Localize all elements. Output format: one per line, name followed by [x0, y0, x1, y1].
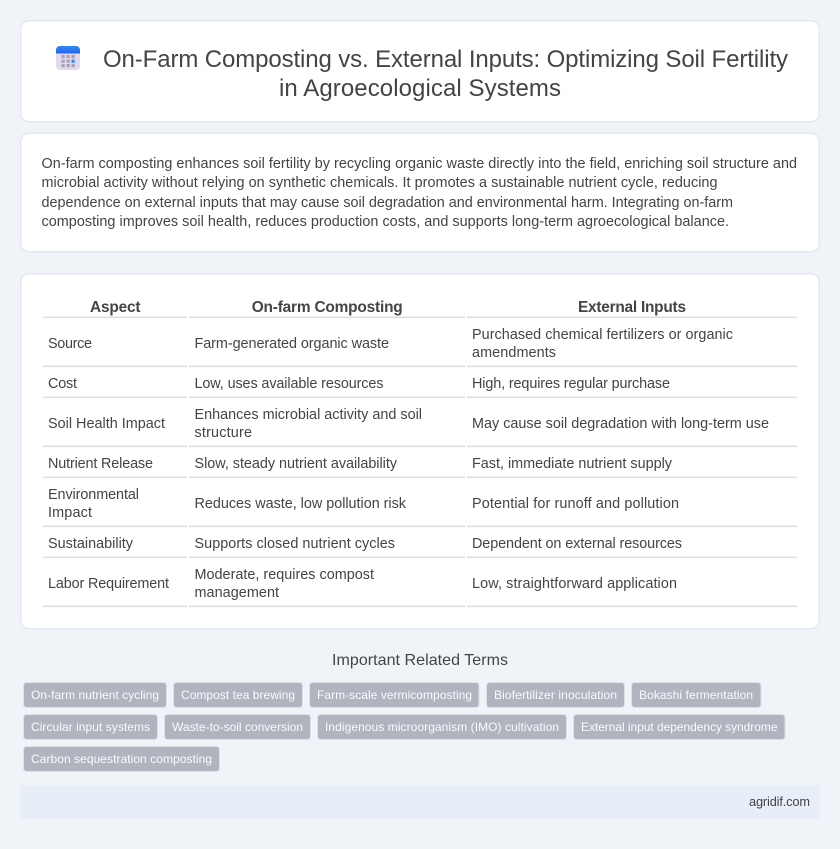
row: nutrient release: Fast, immediate nutrient supply: [472, 456, 673, 472]
tag list: Waste-to-soil conversion: [172, 720, 303, 734]
row: labor requirement: Labor Requirement: [48, 576, 169, 592]
tag list: On-farm nutrient cycling: [31, 688, 159, 702]
row: environmental impact: Reduces waste, low pollution risk: [194, 496, 407, 512]
row: environmental impact: Potential for runoff and pollution: [472, 496, 679, 512]
tag list: [24, 682, 785, 772]
row: cost: [48, 376, 670, 392]
row: nutrient release: [48, 456, 673, 472]
row: labor requirement: Low, straightforward application: [472, 576, 677, 592]
row: environmental impact: Environmental: [48, 487, 139, 503]
row: nutrient release: Slow, steady nutrient availability: [194, 456, 398, 472]
row: source: Source: [48, 336, 92, 352]
row: source: amendments: [472, 345, 556, 361]
table header: On-farm Composting: [252, 299, 403, 316]
row: soil health impact: May cause soil degradation with long-term use: [472, 416, 769, 432]
tag list: External input dependency syndrome: [581, 720, 778, 734]
tag list: Compost tea brewing: [181, 688, 295, 702]
row: cost: Cost: [48, 376, 77, 392]
tag list: Carbon sequestration composting: [31, 752, 212, 766]
text block: description: On-farm composting enhances soil fertility by recycling organic waste directly into the field, enriching soil structure and: [42, 156, 797, 172]
row: source: Farm-generated organic waste: [194, 336, 389, 352]
text block: description: dependence on external inputs that may cause soil degradation and environmental harm. Integrating on-farm: [42, 195, 733, 211]
tag list: Indigenous microorganism (IMO) cultivation: [325, 720, 559, 734]
text block: description: composting improves soil health, reduces production costs, and supports long-term agroecological balance.: [42, 214, 729, 230]
table header: Aspect: [90, 299, 140, 316]
row: cost: High, requires regular purchase: [472, 376, 670, 392]
panel: description: [21, 133, 819, 252]
row: soil health impact: Enhances microbial activity and soil: [194, 407, 422, 423]
title: in Agroecological Systems: [279, 75, 561, 102]
tag list: Bokashi fermentation: [639, 688, 753, 702]
tag list: Circular input systems: [31, 720, 150, 734]
tag list: Farm-scale vermicomposting: [317, 688, 472, 702]
heading: important related terms: Important Related Terms: [332, 652, 508, 669]
panel: header: [21, 21, 819, 122]
row: sustainability: Dependent on external resources: [472, 536, 682, 552]
row: sustainability: Sustainability: [48, 536, 134, 552]
icon: calendar: [56, 46, 80, 70]
row: labor requirement: Moderate, requires compost: [194, 567, 374, 583]
footer: [20, 785, 820, 819]
row: nutrient release: Nutrient Release: [48, 456, 153, 472]
row: sustainability: Supports closed nutrient cycles: [194, 536, 395, 552]
tag list: Biofertilizer inoculation: [494, 688, 617, 702]
row: environmental impact: [48, 487, 679, 521]
text block: description: microbial activity without relying on synthetic chemicals. It promotes a sustainable nutrient cycle, reducing: [42, 175, 718, 191]
row: labor requirement: [48, 567, 677, 601]
title: On-Farm Composting vs. External Inputs: Optimizing Soil Fertility: [103, 46, 788, 73]
row: source: [48, 327, 733, 361]
row: soil health impact: Soil Health Impact: [48, 416, 165, 432]
row: environmental impact: Impact: [48, 505, 92, 521]
row: cost: Low, uses available resources: [194, 376, 384, 392]
title: [103, 46, 788, 102]
table header: [90, 299, 686, 316]
row: soil health impact: [48, 407, 769, 441]
panel: comparison table: [21, 274, 819, 629]
text block: description: [42, 156, 797, 230]
table header: External Inputs: [578, 299, 686, 316]
row: source: Purchased chemical fertilizers or organic: [472, 327, 733, 343]
row: soil health impact: structure: [194, 425, 252, 441]
row: labor requirement: management: [194, 585, 279, 601]
footer: agridif.com: [749, 794, 810, 809]
row: sustainability: [48, 536, 682, 552]
